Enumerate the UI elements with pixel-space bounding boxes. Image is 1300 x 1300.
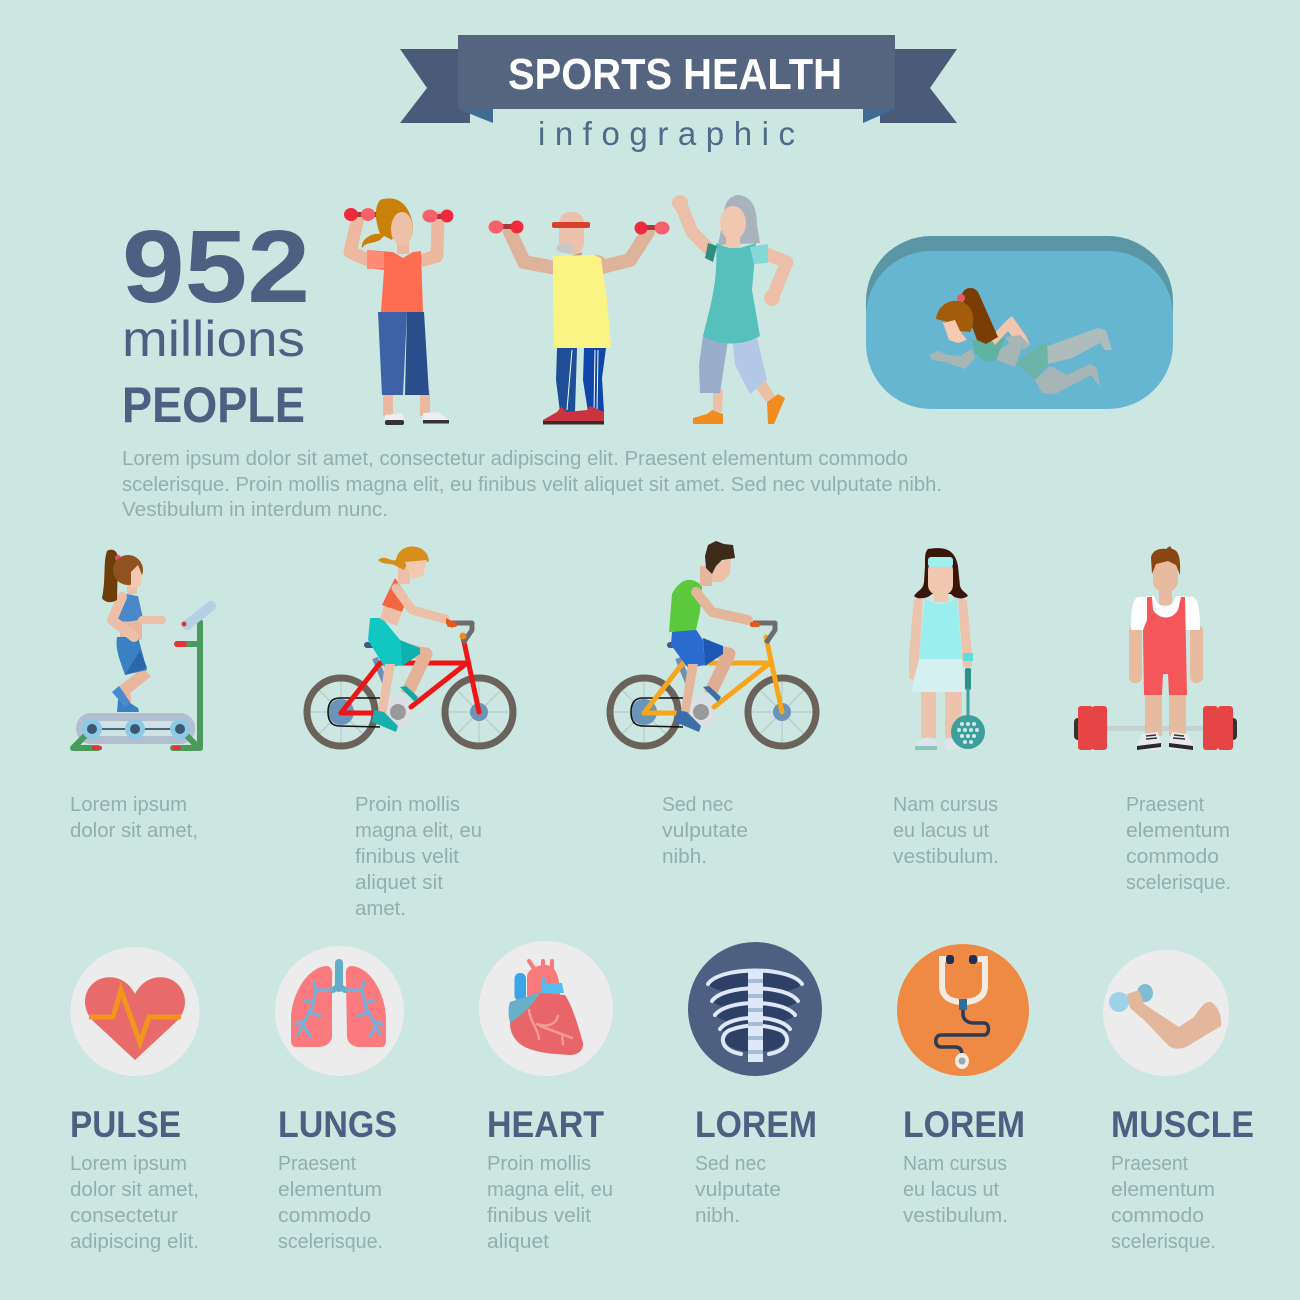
icon: anatomical heart [479, 941, 613, 1076]
barbell [1074, 706, 1237, 750]
icon: rib cage x-ray [688, 942, 822, 1076]
subtitle: infographic [538, 115, 795, 152]
racket [951, 668, 985, 749]
ribbon folds [458, 109, 895, 123]
caption: tennis [893, 794, 999, 868]
icon: muscle arm with dumbbell [1103, 950, 1229, 1076]
body text [695, 1153, 781, 1227]
body text: commodo [1111, 1205, 1204, 1227]
body text: nibh. [695, 1205, 740, 1227]
intro paragraph [122, 448, 942, 521]
spine [748, 970, 763, 1062]
headings and text: lungs [278, 1104, 397, 1253]
caption: weightlifter: Praesent [1126, 794, 1204, 816]
body text: vestibulum. [903, 1205, 1008, 1227]
caption: man cyclist [662, 794, 748, 868]
caption: weightlifter: elementum [1126, 820, 1230, 842]
figure: senior man with dumbbells [488, 212, 670, 424]
body text [903, 1153, 1008, 1227]
pool water [866, 251, 1173, 409]
heading: LOREM [903, 1104, 1025, 1145]
red frame [341, 637, 479, 713]
runner [102, 550, 162, 712]
body text: elementum [1111, 1179, 1215, 1201]
caption: tennis: eu lacus ut [893, 820, 989, 842]
body text: eu lacus ut [903, 1179, 999, 1201]
chain and crank [328, 642, 414, 728]
rider [368, 546, 457, 732]
body text: adipiscing elit. [70, 1231, 199, 1253]
caption: woman cyclist: magna elit, eu [355, 820, 482, 842]
caption: weightlifter: scelerisque. [1126, 872, 1231, 894]
heading: MUSCLE [1111, 1104, 1254, 1145]
figure: senior woman walking [672, 195, 787, 424]
orange frame [644, 637, 782, 713]
body text: vulputate [695, 1179, 781, 1201]
caption: woman cyclist [355, 794, 482, 920]
body text: dolor sit amet, [70, 1179, 199, 1201]
icon: pulse heart [70, 947, 200, 1076]
body text: consectetur [70, 1205, 178, 1227]
figure: woman on red bicycle [306, 546, 514, 747]
body text: Sed nec [695, 1153, 766, 1175]
body text: commodo [278, 1205, 371, 1227]
caption: man cyclist: nibh. [662, 846, 707, 868]
number: 952 [122, 209, 310, 324]
pool rim [866, 236, 1173, 386]
body text: Nam cursus [903, 1153, 1007, 1175]
shoes [1137, 732, 1193, 750]
body text: Praesent [278, 1153, 356, 1175]
heading: PULSE [70, 1104, 181, 1145]
caption: treadmill: dolor sit amet, [70, 820, 198, 842]
body text: magna elit, eu [487, 1179, 613, 1201]
intro paragraph: Vestibulum in interdum nunc. [122, 499, 388, 521]
figure: weightlifter [1074, 546, 1237, 750]
body text: aliquet [487, 1231, 549, 1253]
headings and text: muscle [1111, 1104, 1254, 1253]
icon: stethoscope [897, 944, 1029, 1076]
body text [1111, 1153, 1216, 1253]
figure: tennis player [909, 548, 985, 750]
ribbon tails [400, 49, 957, 123]
headings and text: lorem x-ray [695, 1104, 817, 1227]
headings and text: pulse [70, 1104, 199, 1253]
caption: treadmill [70, 794, 198, 842]
unit: millions [122, 311, 305, 367]
caption: weightlifter [1126, 794, 1231, 894]
title text: SPORTS HEALTH [508, 50, 842, 99]
body text: finibus velit [487, 1205, 591, 1227]
wheels [306, 677, 514, 747]
caption: weightlifter: commodo [1126, 846, 1219, 868]
wheels [609, 677, 817, 747]
treadmill [73, 606, 211, 748]
body text: Praesent [1111, 1153, 1188, 1175]
body text [278, 1153, 383, 1253]
swimmer [929, 288, 1112, 394]
body text: Lorem ipsum [70, 1153, 187, 1175]
body text: elementum [278, 1179, 382, 1201]
caption: woman cyclist: finibus velit [355, 846, 459, 868]
heading: HEART [487, 1104, 604, 1145]
body text: scelerisque. [278, 1231, 383, 1253]
rider [669, 541, 760, 732]
caption: tennis: vestibulum. [893, 846, 999, 868]
figure: young woman with dumbbells [344, 198, 454, 425]
chain and crank [631, 642, 717, 728]
intro paragraph: Lorem ipsum dolor sit amet, consectetur adipiscing elit. Praesent elementum commodo [122, 448, 908, 470]
headings and text: heart [487, 1104, 613, 1253]
headings and text: lorem stethoscope [903, 1104, 1025, 1227]
caption: treadmill: Lorem ipsum [70, 794, 187, 816]
body text: scelerisque. [1111, 1231, 1216, 1253]
body text: Proin mollis [487, 1153, 591, 1175]
heading: LUNGS [278, 1104, 397, 1145]
people label: PEOPLE [122, 377, 305, 433]
figure: treadmill runner [73, 550, 211, 748]
heading: LOREM [695, 1104, 817, 1145]
swimming pool with swimmer [866, 236, 1173, 409]
big statistic [122, 209, 310, 433]
figure: man on orange bicycle [609, 541, 817, 747]
intro paragraph: scelerisque. Proin mollis magna elit, eu finibus velit aliquet sit amet. Sed nec vulputate nibh. [122, 474, 942, 496]
body text [487, 1153, 613, 1253]
caption: woman cyclist: amet. [355, 898, 406, 920]
body text [70, 1153, 199, 1253]
ribs [708, 970, 802, 1054]
ribbon main band [458, 35, 895, 109]
caption: woman cyclist: aliquet sit [355, 872, 443, 894]
caption: man cyclist: vulputate [662, 820, 748, 842]
title banner [400, 35, 957, 152]
caption: woman cyclist: Proin mollis [355, 794, 460, 816]
icon: lungs [275, 946, 404, 1076]
caption: tennis: Nam cursus [893, 794, 998, 816]
caption: man cyclist: Sed nec [662, 794, 733, 816]
